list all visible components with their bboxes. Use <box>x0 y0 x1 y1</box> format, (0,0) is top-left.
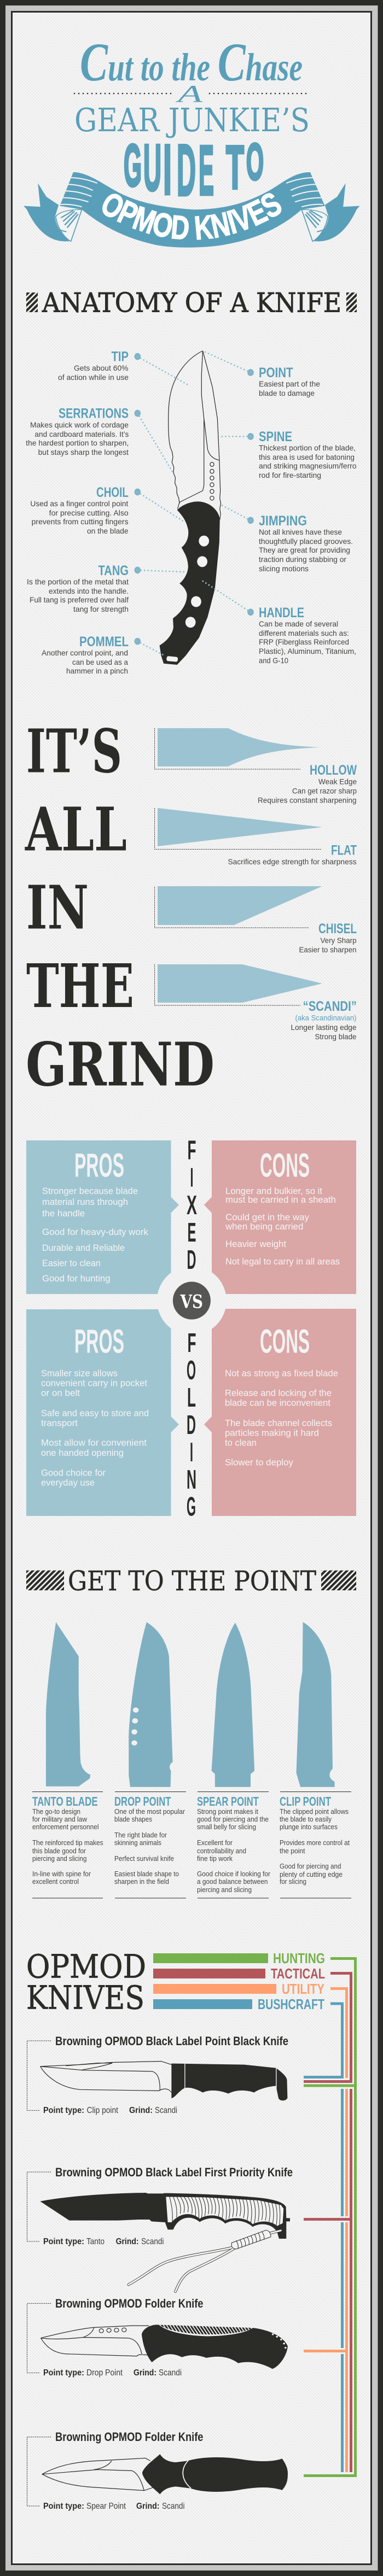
column: tanto blade: for military and law <box>32 1815 88 1823</box>
callout: handle <box>259 606 356 665</box>
column: tanto blade: excellent control <box>32 1877 79 1886</box>
vertical word: fixed: X <box>187 1191 197 1220</box>
connector lines: bushcraft <box>304 2002 344 2472</box>
callout: serrations: the hardest portion to sharpen, <box>26 438 129 447</box>
blade: spear point <box>212 1623 254 1787</box>
panel: folding cons <box>204 1309 356 1516</box>
panel: folding pros: convenient carry in pocket <box>41 1379 147 1389</box>
panel: fixed pros: Stronger because blade <box>42 1186 138 1196</box>
heading: get to the point: GET TO THE POINT <box>68 1565 316 1597</box>
title: guide to: E <box>199 131 214 210</box>
panel: folding pros: one handed opening <box>41 1448 124 1458</box>
knife card: point black: Clip point <box>86 2106 118 2115</box>
column: spear point: fine tip work <box>197 1854 233 1863</box>
callout: tip <box>58 350 129 382</box>
callout: spine: rod for fire-starting <box>259 471 321 479</box>
panel: folding cons: blade can be inconvenient <box>225 1398 330 1408</box>
grind: hollow: Can get razor sharp <box>292 787 357 795</box>
connector lines: hunting <box>304 1957 357 2477</box>
section: fixed vs folding <box>26 1135 356 1522</box>
callout: choil <box>30 485 129 535</box>
column: spear point: small belly for slicing <box>197 1823 256 1831</box>
knife card: folder spear point <box>27 2430 288 2511</box>
column: drop point: skinning animals <box>114 1839 161 1847</box>
panel: folding pros: Good choice for <box>41 1468 106 1478</box>
legend: utility: UTILITY <box>282 1981 324 1997</box>
hatch block right <box>346 292 357 312</box>
vertical word: folding: D <box>187 1410 196 1440</box>
legend: tactical: TACTICAL <box>271 1965 325 1982</box>
panel: folding pros: Most allow for convenient <box>41 1438 147 1448</box>
grind: scandi: Longer lasting edge <box>291 1023 357 1032</box>
column: tanto blade: The go-to design <box>32 1807 80 1816</box>
knife card: first priority: Browning OPMOD Black Label First Priority Knife <box>55 2165 293 2179</box>
knife card: folder drop point: Grind: <box>134 2368 156 2378</box>
knife card: point black <box>27 2034 288 2115</box>
column: tanto blade: In-line with spine for <box>32 1870 91 1878</box>
callout: pommel: hammer in a pinch <box>66 666 128 675</box>
panel: fixed pros: PROS <box>74 1147 124 1184</box>
callout: handle: HANDLE <box>259 606 304 620</box>
heading: anatomy of a knife: ANATOMY OF A KNIFE <box>42 288 341 318</box>
panel: fixed cons: Heavier weight <box>225 1239 286 1249</box>
handle holes <box>166 536 209 662</box>
callout: tip: TIP <box>112 350 129 365</box>
column: drop point: The right blade for <box>114 1831 167 1839</box>
knife card: folder drop point: Drop Point <box>86 2368 123 2378</box>
column: drop point: DROP POINT <box>114 1794 171 1808</box>
ribbon text: OPMOD KNIVES <box>102 193 281 240</box>
column: drop point: Perfect survival knife <box>114 1854 174 1863</box>
knife card: point black: Browning OPMOD Black Label Point Black Knife <box>55 2034 288 2048</box>
knife card: folder spear point: Spear Point <box>86 2502 126 2511</box>
grind: hollow: Requires constant sharpening <box>258 796 357 805</box>
callout: choil: for precise cutting. Also <box>49 508 129 517</box>
callout: jimping: thoughtfully placed grooves. <box>259 537 353 546</box>
legend: bushcraft: BUSHCRAFT <box>258 1996 324 2012</box>
column: clip point: plenty of cutting edge <box>280 1870 343 1878</box>
callout: choil: CHOIL <box>96 485 129 500</box>
grind: hollow: Weak Edge <box>318 777 357 786</box>
legend: utility <box>153 1981 324 1997</box>
column: spear point: SPEAR POINT <box>197 1794 259 1808</box>
column: clip point: The clipped point allows <box>280 1807 349 1816</box>
knife card: folder spear point: Scandi <box>162 2502 185 2511</box>
column: spear point: good for piercing and the <box>197 1815 269 1823</box>
knife card: point black: Grind: <box>129 2106 153 2115</box>
blade shapes <box>46 1622 335 1787</box>
grind: scandi <box>155 964 357 1041</box>
section: get to the point <box>26 1565 356 1898</box>
grind: chisel <box>155 886 357 954</box>
column: tanto blade: piercing and slicing <box>32 1854 86 1863</box>
title: guide to: D <box>177 130 196 211</box>
knife handle <box>159 501 220 665</box>
panel: fixed cons: Not legal to carry in all areas <box>225 1257 340 1267</box>
callout: serrations: Makes quick work of cordage <box>30 420 129 429</box>
column: clip point <box>280 1792 351 1898</box>
callout: spine <box>259 430 357 479</box>
column: spear point: Good choice if looking for <box>197 1870 271 1878</box>
hatch block left <box>26 1571 64 1590</box>
connector lines: tactical <box>304 1972 352 2472</box>
lanyard cord <box>129 2230 281 2292</box>
column: spear point: Strong point makes it <box>197 1807 258 1816</box>
vs badge <box>157 1266 227 1335</box>
heading words: IT’S <box>26 716 122 787</box>
knife drawing <box>40 2193 290 2292</box>
legend: hunting: HUNTING <box>273 1950 325 1966</box>
vertical word: fixed <box>187 1135 197 1275</box>
vertical word: fixed: D <box>187 1245 196 1275</box>
title: guide to <box>124 130 264 211</box>
knife card: first priority: Point type: <box>43 2237 84 2246</box>
vertical word: folding: F <box>187 1328 196 1358</box>
knife card: point black: Scandi <box>155 2106 177 2115</box>
callout: point: blade to damage <box>259 389 315 397</box>
column: spear point: a good balance between <box>197 1877 268 1886</box>
grind: flat: FLAT <box>331 844 357 858</box>
knife drawing <box>41 2324 288 2369</box>
title block <box>24 32 360 248</box>
vertical word: folding: L <box>187 1383 196 1413</box>
title block: O <box>246 133 264 190</box>
title: guide to: U <box>143 131 161 204</box>
callout: choil: on the blade <box>87 526 129 535</box>
heading words: GRIND <box>26 1029 214 1100</box>
knife card: first priority <box>27 2165 293 2292</box>
grind: scandi: “SCANDI” <box>303 999 357 1014</box>
panel: fixed cons: CONS <box>260 1147 310 1184</box>
callout: spine: this area is used for batoning <box>259 453 355 461</box>
grind: chisel: Very Sharp <box>321 936 357 945</box>
column: clip point: for slicing <box>280 1877 306 1886</box>
blade: drop point <box>129 1622 173 1787</box>
callout: jimping: slicing motions <box>259 564 309 573</box>
panel: folding cons: particles making it hard <box>225 1428 319 1438</box>
section: opmod knives <box>26 1947 357 2511</box>
panel: folding pros <box>26 1309 179 1516</box>
ribbon left end <box>24 178 97 242</box>
panel: folding cons: Slower to deploy <box>225 1458 294 1468</box>
legend: hunting <box>153 1950 325 1966</box>
panel: folding cons: to clean <box>225 1438 257 1448</box>
knife card: folder spear point: Grind: <box>136 2502 160 2511</box>
panel: folding cons: The blade channel collects <box>225 1419 332 1428</box>
callout: serrations: SERRATIONS <box>59 407 129 421</box>
column: drop point: One of the most popular <box>114 1807 185 1816</box>
knife card: point black: Point type: <box>43 2106 84 2115</box>
column: spear point <box>197 1792 271 1898</box>
callout: choil: prevents from cutting fingers <box>32 517 129 526</box>
knife card: folder drop point <box>27 2297 288 2378</box>
callout: pommel <box>42 635 129 675</box>
heading: opmod knives: KNIVES <box>26 1979 144 2017</box>
column: clip point: plunge into surfaces <box>280 1823 338 1831</box>
vertical word: fixed: I <box>190 1163 194 1192</box>
callout: jimping: Not all knives have these <box>259 528 342 536</box>
panel: fixed cons: must be carried in a sheath <box>225 1195 336 1205</box>
panel: fixed pros: Good for hunting <box>42 1274 111 1284</box>
panel: fixed pros: Good for heavy-duty work <box>42 1227 149 1237</box>
callout: tip: Gets about 60% <box>74 364 128 372</box>
knife drawing <box>40 2061 287 2100</box>
title: guide to: I <box>163 130 172 209</box>
dotted divider left <box>74 93 174 94</box>
vs badge: VS <box>180 1291 203 1313</box>
panel: folding pros: PROS <box>74 1322 124 1360</box>
legend: tactical <box>153 1965 325 1982</box>
column: tanto blade: TANTO BLADE <box>32 1794 98 1808</box>
grind: chisel: CHISEL <box>318 922 357 936</box>
knife card: folder spear point: Browning OPMOD Folder Knife <box>55 2430 204 2444</box>
panel: fixed pros: Easier to clean <box>42 1258 101 1268</box>
panel: fixed pros: Durable and Reliable <box>42 1243 125 1253</box>
section: it's all in the grind <box>25 716 357 1100</box>
connector lines: utility <box>304 1987 348 2472</box>
callout: spine: Thickest portion of the blade, <box>259 443 356 452</box>
callout: pommel: Another control point, and <box>42 648 128 657</box>
panel: folding cons: CONS <box>260 1322 310 1360</box>
callout: tang: Is the portion of the metal that <box>27 577 129 586</box>
column: drop point: sharpen in the field <box>114 1877 169 1886</box>
callout: choil: Used as a finger control point <box>30 499 129 508</box>
column: clip point: the blade to easily <box>280 1815 332 1823</box>
grind: scandi: Strong blade <box>315 1032 357 1041</box>
column: clip point: Provides more control at <box>280 1839 350 1847</box>
callout dots <box>135 353 254 645</box>
grind: hollow: HOLLOW <box>310 763 357 778</box>
callout: serrations: and cardboard materials. It’s <box>34 430 129 438</box>
section: anatomy of a knife <box>26 288 357 675</box>
heading: opmod knives: OPMOD <box>26 1947 146 1986</box>
hatch block right <box>321 1571 356 1590</box>
panel: fixed cons: Could get in the way <box>225 1213 310 1222</box>
panel: fixed pros <box>26 1140 179 1294</box>
callout: pommel: can be used as a <box>72 658 128 666</box>
ribbon band <box>60 172 325 248</box>
section: fixed vs folding: G <box>187 1492 196 1522</box>
column: spear point: piercing and slicing <box>197 1886 252 1894</box>
heading words: ALL <box>25 794 127 864</box>
column: tanto blade: The reinforced tip makes <box>32 1839 103 1847</box>
callout: spine: and striking magnesium/ferro <box>259 461 357 470</box>
callout: tang: tang for strength <box>73 605 129 613</box>
panel: folding pros: Smaller size allows <box>41 1369 118 1379</box>
vertical word: folding <box>187 1328 196 1522</box>
heading words: IN <box>26 873 89 943</box>
blade: tanto <box>46 1622 90 1787</box>
hatch block left <box>26 292 38 312</box>
panel: fixed cons: when being carried <box>225 1222 303 1232</box>
column: drop point <box>114 1792 186 1898</box>
knife card: folder drop point: Browning OPMOD Folder Knife <box>55 2297 204 2310</box>
grind: scandi: (aka Scandinavian) <box>295 1014 357 1022</box>
panel: folding pros: transport <box>41 1419 78 1428</box>
knife card: folder drop point: Scandi <box>159 2368 182 2378</box>
callout: handle: different materials such as: <box>259 629 349 637</box>
callout: jimping: They are great for providing <box>259 546 350 554</box>
column: drop point: blade shapes <box>114 1815 152 1823</box>
callout: jimping: JIMPING <box>259 514 307 529</box>
panel: fixed cons <box>204 1140 356 1294</box>
callout: jimping: traction during stabbing or <box>259 555 346 564</box>
callout: handle: Can be made of several <box>259 619 338 628</box>
heading: opmod knives <box>26 1947 146 2017</box>
grind: flat: Sacrifices edge strength for sharpness <box>228 857 357 866</box>
dotted divider right <box>210 93 309 94</box>
column: tanto blade <box>32 1792 103 1898</box>
section: fixed vs folding: O <box>187 1356 196 1385</box>
callout leader lines <box>137 351 251 656</box>
ribbon banner <box>24 172 360 248</box>
callout: jimping <box>259 514 353 573</box>
callout: handle: Plastic), Aluminum, Titanium, <box>259 647 356 655</box>
callout: handle: and G-10 <box>259 656 288 665</box>
knife drawing <box>42 2454 288 2495</box>
title: gear junkie's: GEAR JUNKIE’S <box>74 101 310 139</box>
column: clip point: the point <box>280 1847 305 1855</box>
knife card: folder drop point: Point type: <box>43 2368 84 2378</box>
panel: folding pros: Safe and easy to store and <box>41 1408 149 1418</box>
callout: point: Easiest part of the <box>259 379 320 388</box>
panel: folding cons: Release and locking of the <box>225 1388 332 1398</box>
callout: point: POINT <box>259 366 293 380</box>
blade: clip point <box>296 1622 335 1787</box>
vertical word: folding: N <box>187 1465 196 1495</box>
heading words <box>25 716 214 1100</box>
vertical word: fixed: F <box>187 1135 196 1165</box>
callout: point <box>259 366 320 397</box>
callout: tang: TANG <box>98 564 129 578</box>
column: clip point: Good for piercing and <box>280 1862 341 1870</box>
callout: tang <box>27 564 129 613</box>
callout: pommel: POMMEL <box>79 635 129 649</box>
vertical word: folding: I <box>190 1438 193 1467</box>
knife diagram <box>135 351 254 665</box>
column: spear point: controllability and <box>197 1847 246 1855</box>
column: spear point: Excellent for <box>197 1839 233 1847</box>
callout: handle: FRP (Fiberglass Reinforced <box>259 637 349 646</box>
title: guide to: G <box>124 132 142 199</box>
panel: fixed pros: material runs through <box>42 1197 128 1207</box>
knife card: folder spear point: Point type: <box>43 2502 84 2511</box>
panel: folding cons: Not as strong as fixed blade <box>225 1369 338 1379</box>
vertical word: fixed: E <box>187 1218 196 1248</box>
blade outline <box>169 351 221 519</box>
panel: fixed cons: Longer and bulkier, so it <box>225 1186 322 1196</box>
panel: fixed pros: the handle <box>42 1209 85 1219</box>
grind: flat <box>155 808 357 866</box>
title: cut to the chase: Cut to the Chase <box>80 32 303 92</box>
grind: hollow <box>155 728 357 805</box>
callout: serrations <box>26 407 129 456</box>
heading words: THE <box>26 951 134 1021</box>
callout: serrations: but stays sharp the longest <box>38 448 129 456</box>
title: guide to: T <box>226 133 244 202</box>
script letter A: A <box>175 80 204 107</box>
grind: chisel: Easier to sharpen <box>299 945 357 954</box>
knife card: first priority: Grind: <box>116 2237 139 2246</box>
knife card: first priority: Tanto <box>86 2237 105 2246</box>
column: drop point: Easiest blade shape to <box>114 1870 179 1878</box>
ribbon right end <box>286 178 360 242</box>
legend: bushcraft <box>153 1996 324 2012</box>
callout: tip: of action while in use <box>58 373 129 382</box>
callout: spine: SPINE <box>259 430 292 444</box>
column: tanto blade: enforcement personnel <box>32 1823 99 1831</box>
callout: tang: Full tang is preferred over half <box>30 595 129 604</box>
panel: folding pros: everyday use <box>41 1478 95 1488</box>
callout: tang: extends into the handle. <box>49 587 129 595</box>
column: clip point: CLIP POINT <box>280 1794 331 1808</box>
panel: folding pros: or on belt <box>41 1388 80 1398</box>
knife card: first priority: Scandi <box>141 2237 164 2246</box>
column: tanto blade: this blade good for <box>32 1847 86 1855</box>
